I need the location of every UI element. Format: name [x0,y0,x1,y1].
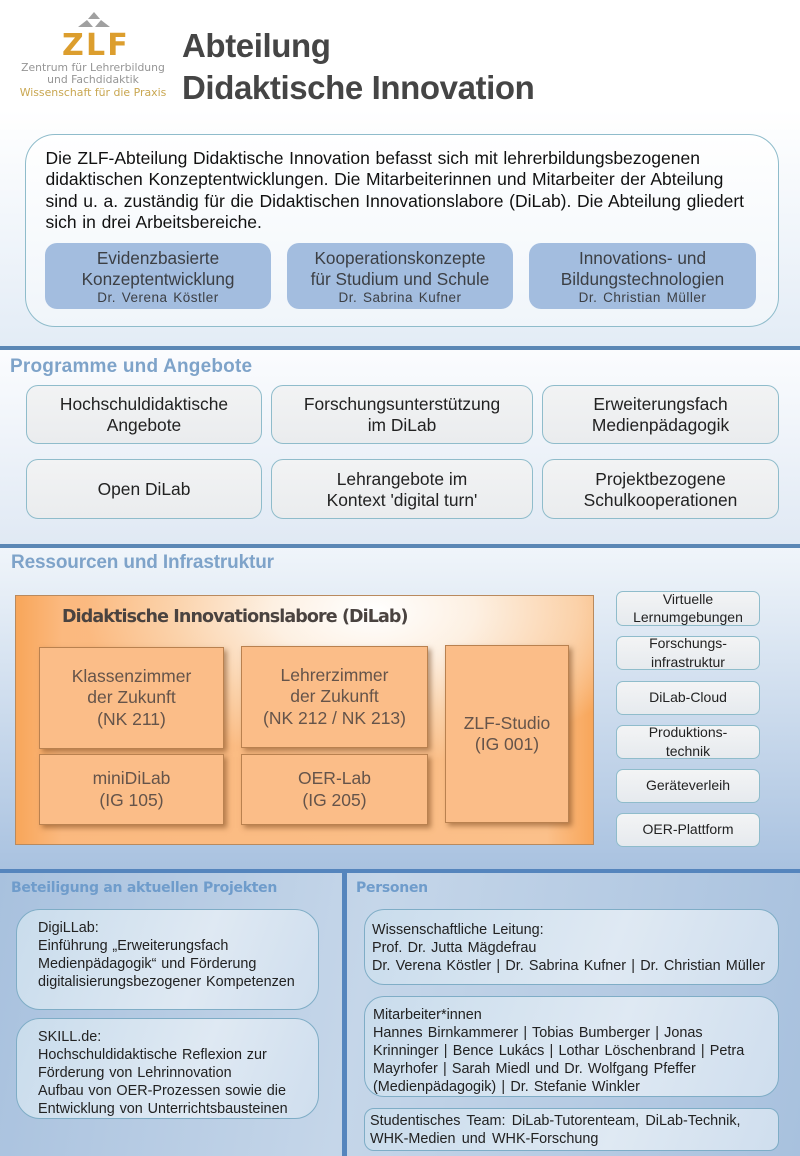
Mitarbeiter text: Krinninger | Bence Lukács | Lothar Löschenbrand | Petra [373,1043,744,1059]
logo subtitle [21,61,165,86]
Leitung text: Dr. Verena Köstler | Dr. Sabrina Kufner | Dr. Christian Müller [372,958,765,974]
Mitarbeiter text: Mitarbeiter*innen [373,1007,482,1023]
room: miniDiLab [39,754,224,825]
title [182,27,534,106]
Team text: WHK-Medien und WHK-Forschung [370,1131,598,1147]
Mitarbeiter text: Hannes Birnkammerer | Tobias Bumberger | Jonas [373,1025,703,1041]
Team text: Studentisches Team: DiLab-Tutorenteam, DiLab-Technik, [370,1113,741,1129]
programme: Hochschuldidaktische Angebote [26,385,262,444]
resource: Virtuelle Lernumgebungen: Virtuelle [663,590,713,606]
DigiLLab text [38,920,295,990]
work area: Evidenzbasierte Konzeptentwicklung: Dr. Verena Köstler [97,290,219,304]
work area: Kooperationskonzepte: Dr. Sabrina Kufner [338,290,462,304]
logo subtitle: Zentrum für Lehrerbildung [21,61,165,74]
programme: Hochschuldidaktische Angebote: Angebote [107,415,181,435]
heading: Beteiligung an aktuellen Projekten: Beteiligung an aktuellen Projekten [11,880,277,896]
programme: Schulkooperationen [542,459,779,519]
logo subtitle: und Fachdidaktik [47,73,139,86]
logo: ZLF [20,12,166,99]
people: Studentisches Team [364,1108,779,1151]
heading: Programme und Angebote: Programme und Angebote [10,356,252,377]
page background: lower sections [0,873,800,1156]
SKILL.de text: Hochschuldidaktische Reflexion zur [38,1047,267,1063]
resource: Virtuelle Lernumgebungen [616,591,760,626]
programme: Schulkooperationen: Schulkooperationen [584,490,737,510]
work area: Kooperationskonzepte [287,243,513,309]
work area: Innovations- und Bildungstechnologien [529,243,756,309]
SKILL.de text [38,1029,288,1117]
people: Wissenschaftliche Leitung [364,909,779,985]
Mitarbeiter text [373,1007,744,1095]
programme: Hochschuldidaktische Angebote: Hochschuldidaktische [60,394,228,414]
work area: Evidenzbasierte Konzeptentwicklung [45,243,271,309]
room: Klassenzimmer [39,647,224,749]
room: Lehrerzimmer: Lehrerzimmer [281,665,388,685]
work area: Innovations- und Bildungstechnologien: Dr. Christian Müller [579,290,706,304]
programme: Erweiterungsfach: Medienpädagogik [592,415,729,435]
resource: DiLab-Cloud [616,681,760,715]
resource: Produktionstechnik: technik [666,742,710,758]
title: Didaktische Innovation [182,68,534,106]
room: Klassenzimmer: (NK 211) [97,709,166,729]
resource: Produktionstechnik [616,725,760,759]
Leitung text: Prof. Dr. Jutta Mägdefrau [372,940,536,956]
DiLab heading: Didaktische Innovationslabore (DiLab) [62,607,408,627]
room: Lehrerzimmer: (NK 212 / NK 213) [263,708,406,728]
page background: programme section [0,350,800,544]
icon: logo roof [78,12,110,27]
logo tagline: Wissenschaft für die Praxis [20,86,166,99]
programme: Forschungsunterstützung: im DiLab [368,415,436,435]
work area: Innovations- und Bildungstechnologien: Bildungstechnologien [561,268,724,288]
programme: Open DiLab: Open DiLab [98,479,190,499]
room: OER-Lab [241,754,428,825]
resource: Virtuelle Lernumgebungen: Lernumgebungen [633,609,743,625]
intro text [46,148,744,232]
DigiLLab text: Einführung „Erweiterungsfach [38,938,228,954]
programme: Lehrangebote [271,459,533,519]
room: OER-Lab: OER-Lab [298,768,371,788]
logo letters: ZLF [62,28,130,63]
DigiLLab text: Medienpädagogik“ und Förderung [38,956,256,972]
room: miniDiLab: (IG 105) [99,790,164,810]
Team text [370,1113,741,1147]
project: DigiLLab [16,909,319,1010]
Mitarbeiter text: (Medienpädagogik) | Dr. Stefanie Winkler [373,1079,640,1095]
room: Klassenzimmer: Klassenzimmer [72,666,191,686]
programme: Erweiterungsfach [542,385,779,444]
work area: Evidenzbasierte Konzeptentwicklung: Konzeptentwicklung [82,268,234,288]
room: Lehrerzimmer: der Zukunft [290,686,379,706]
Leitung text: Wissenschaftliche Leitung: [372,922,544,938]
resource: Geräteverleih [616,769,760,803]
programme: Schulkooperationen: Projektbezogene [595,468,726,488]
intro text: sich in drei Arbeitsbereiche. [46,212,262,232]
SKILL.de text: Aufbau von OER-Prozessen sowie die [38,1083,286,1099]
programme: Erweiterungsfach: Erweiterungsfach [593,394,728,414]
room: ZLF-Studio: (IG 001) [475,734,539,754]
DigiLLab text: DigiLLab: [38,920,99,936]
resource: Geräteverleih: Geräteverleih [646,777,730,793]
intro text: didaktischen Konzeptentwicklungen. Die Mitarbeiterinnen und Mitarbeiter der Abteilung [46,169,723,189]
resource: Forschungsinfrastruktur: Forschungs- [649,635,727,651]
heading: Ressourcen und Infrastruktur: Ressourcen und Infrastruktur [11,552,274,573]
intro text: Die ZLF-Abteilung Didaktische Innovation befasst sich mit lehrerbildungsbezogenen [46,148,700,168]
room: Lehrerzimmer [241,646,428,748]
programme: Forschungsunterstützung: Forschungsunterstützung [304,394,500,414]
room: ZLF-Studio [445,645,569,823]
project: SKILL.de [16,1018,319,1119]
resource: OER-Plattform [616,813,760,847]
DigiLLab text: digitalisierungsbezogener Kompetenzen [38,974,295,990]
intro text: sind u. a. zuständig für die Didaktischen Innovationslabore (DiLab). Die Abteilung gliedert [46,191,744,211]
programme: Open DiLab [26,459,262,519]
work area: Kooperationskonzepte: für Studium und Schule [311,268,489,288]
room: miniDiLab: miniDiLab [93,768,170,788]
resource: Forschungsinfrastruktur: infrastruktur [651,654,725,670]
resource: Forschungsinfrastruktur [616,636,760,670]
work area: Kooperationskonzepte: Kooperationskonzepte [314,248,486,268]
work area: Evidenzbasierte Konzeptentwicklung: Evidenzbasierte [97,248,219,268]
Mitarbeiter text: Mayrhofer | Sarah Miedl und Dr. Wolfgang Pfeffer [373,1061,696,1077]
SKILL.de text: Entwicklung von Unterrichtsbausteinen [38,1101,288,1117]
title: Abteilung [182,27,331,64]
people: Mitarbeiter*innen [364,996,779,1097]
panel: introduction [25,134,779,327]
page background: resources section [0,548,800,870]
resource: Produktionstechnik: Produktions- [649,724,727,740]
page background: upper sections [0,0,800,346]
room: Klassenzimmer: der Zukunft [87,687,176,707]
heading: Personen: Personen [356,880,428,896]
work area: Innovations- und Bildungstechnologien: Innovations- und [579,248,706,268]
Leitung text [372,922,765,974]
SKILL.de text: SKILL.de: [38,1029,101,1045]
SKILL.de text: Förderung von Lehrinnovation [38,1065,232,1081]
programme: Forschungsunterstützung [271,385,533,444]
resource: OER-Plattform: OER-Plattform [642,821,734,837]
room: ZLF-Studio: ZLF-Studio [464,712,550,732]
programme: Lehrangebote: Lehrangebote im [337,468,467,488]
programme: Lehrangebote: Kontext 'digital turn' [327,490,477,510]
room: OER-Lab: (IG 205) [302,790,367,810]
panel: DiLab [15,595,594,845]
resource: DiLab-Cloud: DiLab-Cloud [649,689,727,705]
